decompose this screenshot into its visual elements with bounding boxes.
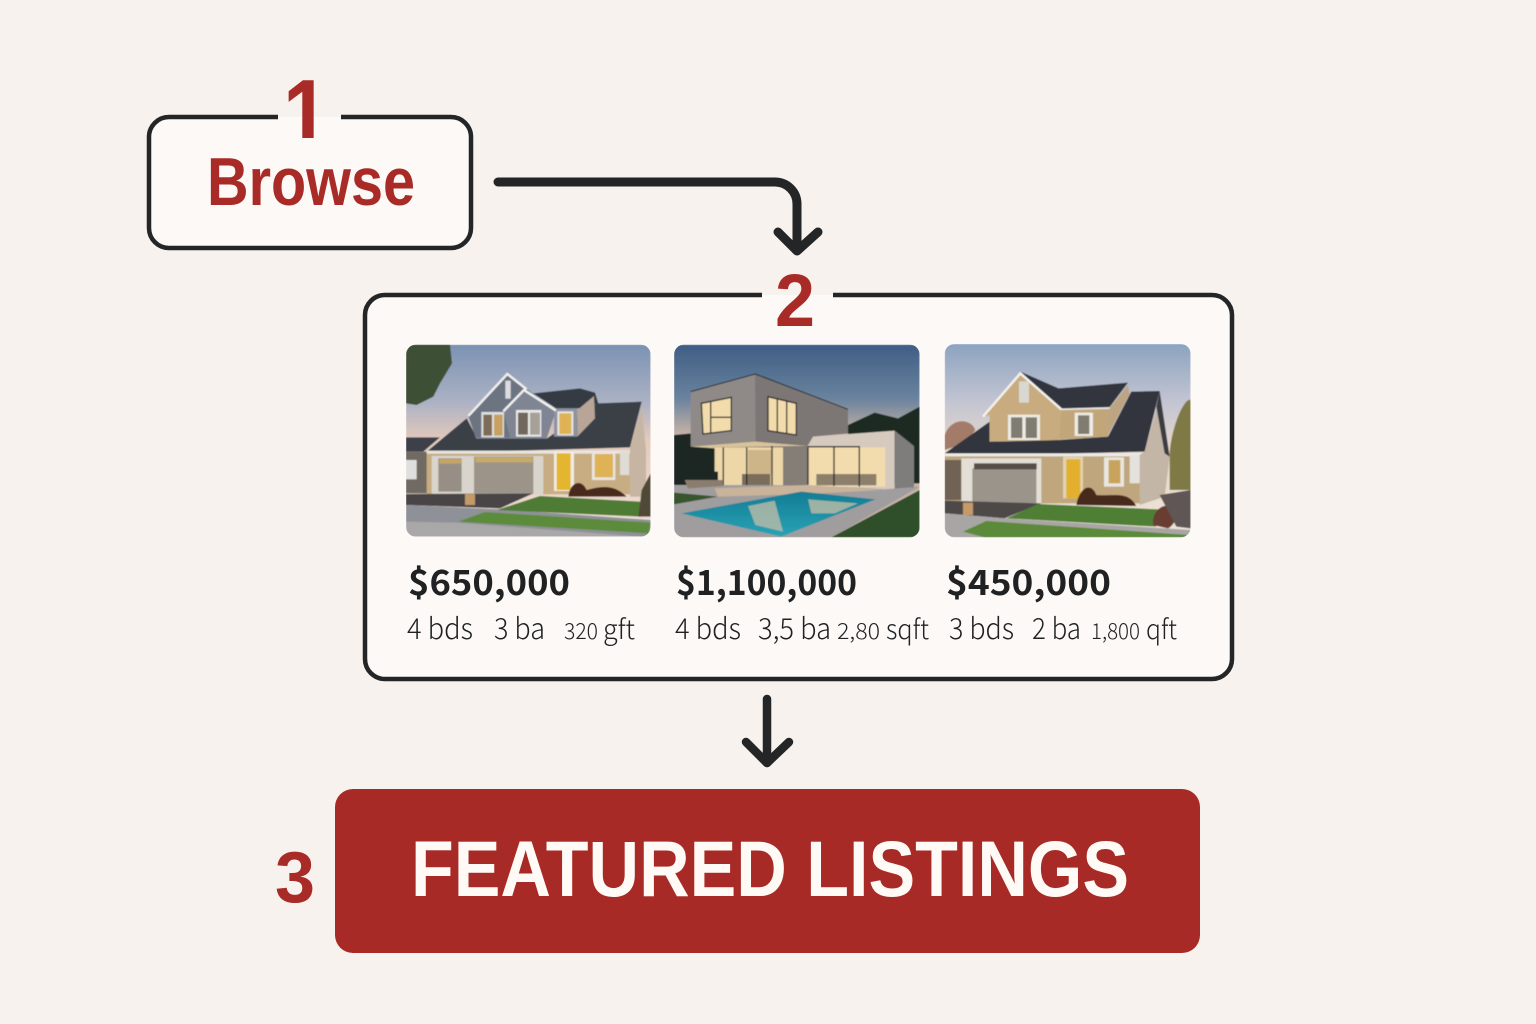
browse box fill [149,117,471,248]
listings panel fill [365,295,1232,679]
banner label: FEATURED LISTINGS [411,824,1129,913]
listings panel outline [365,295,1232,679]
specs 1: 4 bds [407,606,473,648]
step number 3: 3 [275,838,315,918]
specs 1: gft [603,608,635,647]
specs 3: qft [1146,608,1177,647]
price 1: $650,000 [408,555,570,606]
specs 2 [675,606,929,648]
step 2: listings panel [365,259,1232,679]
specs 2: 3,5 ba [758,606,831,648]
step number 2: 2 [775,259,815,342]
specs 2: 2,80 [837,614,880,646]
listing 2 details [675,555,929,648]
photo: modern house with pool [674,345,920,537]
specs 1 [407,606,635,648]
specs 3: 3 bds [949,606,1014,648]
specs 3 [949,606,1177,648]
listing 1 details [407,555,635,648]
arrow: browse to listings [498,182,818,251]
arrow: listings to featured [746,699,789,763]
specs 2: 4 bds [675,606,741,648]
step 1: browse box [149,59,471,248]
browse label: Browse [207,144,415,220]
photo: suburban house 2 [945,344,1191,537]
photo: suburban house 1 [406,345,651,537]
specs 1: 3 ba [494,606,545,648]
banner background [335,789,1200,953]
featured listings banner [335,789,1200,953]
specs 3: 1,800 [1091,614,1140,646]
specs 1: 320 [564,614,598,646]
price 3: $450,000 [946,555,1111,606]
step number 1: 1 [283,59,329,169]
specs 2: sqft [886,608,929,647]
specs 3: 2 ba [1032,606,1081,648]
infographic canvas [146,80,1234,953]
price 2: $1,100,000 [676,555,857,606]
browse box outline [149,117,471,248]
listing 3 details [946,555,1177,648]
